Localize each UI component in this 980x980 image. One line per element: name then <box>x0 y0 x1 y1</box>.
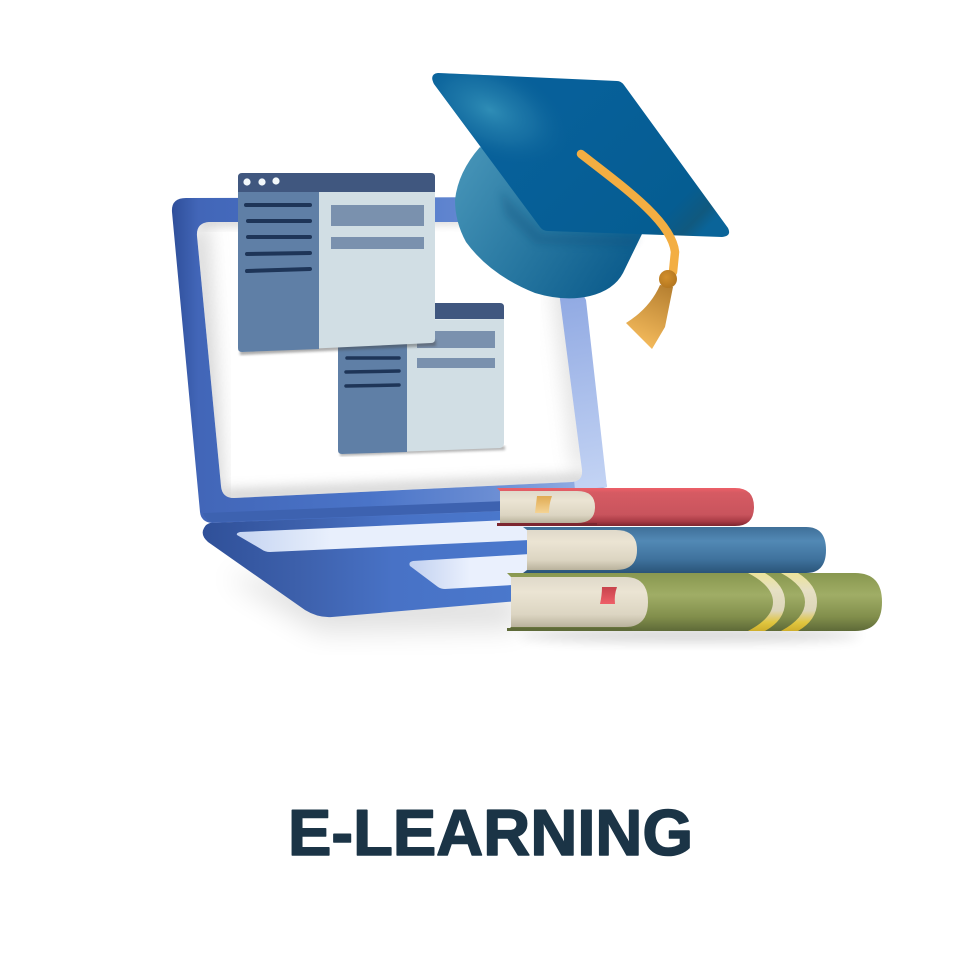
book: blue <box>523 527 826 573</box>
window sidebar <box>238 190 319 352</box>
book bands <box>748 573 785 631</box>
lid lower strip <box>203 500 530 522</box>
title: E-LEARNING <box>288 796 693 869</box>
tassel knot <box>659 270 677 288</box>
tassel <box>626 285 673 349</box>
window title bar <box>238 173 435 192</box>
window sidebar lines <box>346 358 399 386</box>
laptop <box>172 197 607 617</box>
cap highlight <box>432 73 543 148</box>
laptop base <box>203 510 530 617</box>
window title bar <box>425 303 504 319</box>
window control dots <box>243 177 280 186</box>
window: back <box>338 303 505 456</box>
trackpad <box>409 554 530 589</box>
ground shadows <box>225 575 860 642</box>
laptop screen <box>190 215 590 505</box>
window sidebar <box>338 340 407 454</box>
tassel cord <box>581 154 675 272</box>
window content bars <box>417 331 495 368</box>
window content bars <box>331 205 424 249</box>
laptop lid <box>172 197 607 523</box>
lid right edge <box>550 222 607 490</box>
window: front <box>238 173 436 355</box>
keyboard strip <box>237 518 530 552</box>
illustration: e-learning icon and title <box>172 73 882 856</box>
books <box>497 488 882 631</box>
window sidebar lines <box>246 205 310 271</box>
cap board <box>432 73 729 237</box>
cap skull <box>455 147 642 298</box>
graduation cap <box>432 73 730 349</box>
book: red <box>497 488 754 526</box>
book: green <box>507 573 882 631</box>
